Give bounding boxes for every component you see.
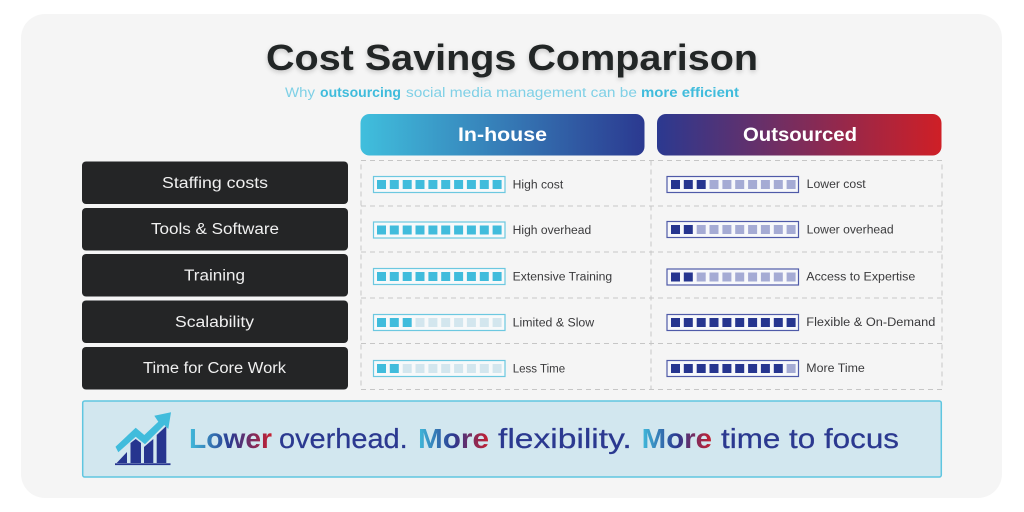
row label: Training: [82, 254, 348, 296]
outsourced bar: Staffing costs, 3 of 10: [667, 176, 798, 192]
in-house bar: Time for Core Work, 2 of 10: [374, 360, 505, 376]
label: Lower overhead: Lower overhead: [807, 225, 894, 237]
row label: Staffing costs: [82, 162, 348, 204]
row labels: [82, 162, 348, 390]
In-house column: [374, 176, 612, 376]
callout banner: [83, 401, 941, 477]
row label: Scalability: Scalability: [175, 314, 254, 331]
subtitle: social media management can be: [406, 85, 637, 100]
subtitle: [285, 85, 740, 100]
row label: Scalability: [82, 300, 348, 343]
outsourced bar: Time for Core Work, 9 of 10: [667, 360, 798, 376]
callout text: overhead.: [279, 423, 408, 454]
subtitle: more efficient: [641, 85, 740, 100]
in-house bar: Scalability, 3 of 10: [374, 314, 505, 330]
icon: rising bar chart with arrow: [115, 412, 171, 465]
column header: Outsourced: Outsourced: [743, 125, 857, 146]
callout text: flexibility.: [498, 423, 632, 454]
subtitle: Why: [285, 85, 315, 100]
callout text: More: [418, 423, 489, 454]
callout text: time to focus: [721, 423, 899, 454]
outsourced bar: Scalability, 10 of 10: [667, 314, 798, 330]
subtitle: outsourcing: [320, 85, 401, 100]
label: Extensive Training: Extensive Training: [513, 272, 612, 284]
row label: Tools & Software: Tools & Software: [151, 221, 279, 238]
label: Lower cost: Lower cost: [807, 179, 867, 191]
Outsourced column: [667, 176, 935, 376]
row label: Staffing costs: Staffing costs: [162, 175, 268, 192]
in-house bar: Staffing costs, 10 of 10: [374, 176, 505, 192]
callout text: [189, 423, 899, 454]
outsourced bar: Training, 2 of 10: [667, 269, 798, 285]
column header: Outsourced: [657, 114, 942, 156]
row label: Training: Training: [184, 268, 245, 284]
in-house bar: Training, 10 of 10: [374, 268, 505, 284]
outsourced bar: Tools & Software, 2 of 10: [667, 222, 798, 238]
in-house bar: Tools & Software, 10 of 10: [374, 222, 505, 238]
label: Flexible & On-Demand: Flexible & On-Demand: [806, 317, 935, 329]
label: Less Time: Less Time: [513, 364, 565, 376]
row label: Time for Core Work: Time for Core Work: [143, 360, 286, 377]
row label: Time for Core Work: [82, 347, 348, 390]
label: More Time: More Time: [806, 363, 865, 375]
column header: In-house: [360, 114, 644, 156]
row label: Tools & Software: [82, 208, 348, 250]
callout text: More: [642, 423, 712, 454]
label: High cost: High cost: [513, 180, 564, 192]
label: High overhead: High overhead: [513, 225, 591, 237]
label: Access to Expertise: Access to Expertise: [806, 272, 915, 284]
column header: In-house: In-house: [458, 125, 547, 146]
label: Limited & Slow: Limited & Slow: [513, 318, 595, 330]
callout text: Lower: [189, 423, 272, 454]
title: Cost Savings Comparison: [266, 37, 758, 78]
